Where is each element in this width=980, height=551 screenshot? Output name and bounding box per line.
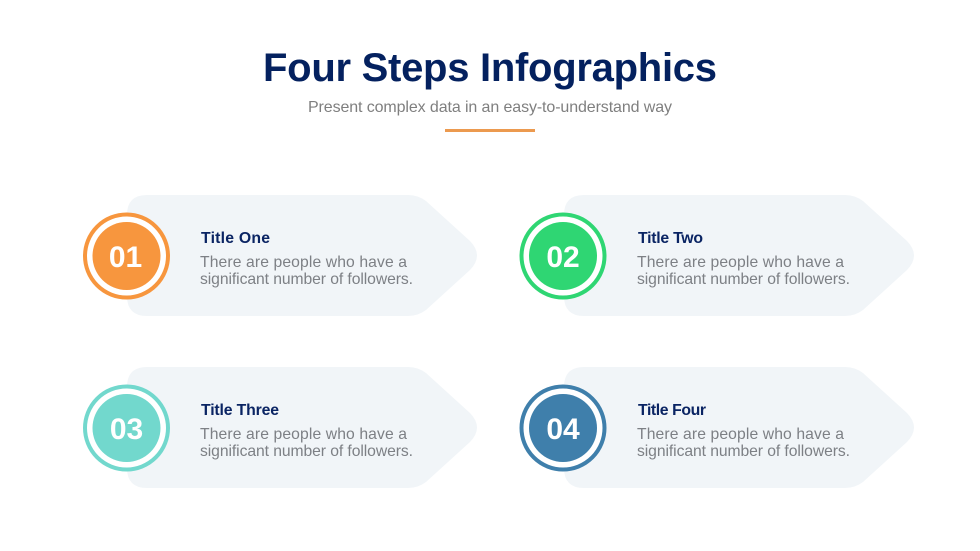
description: There are people who have a (200, 426, 407, 443)
description: significant number of followers. (200, 271, 413, 288)
description: There are people who have a (637, 254, 844, 271)
number badge 04 (522, 386, 604, 470)
number badge 04: 04 (546, 413, 580, 446)
number badge 02 (522, 214, 604, 298)
arrow card (127, 367, 477, 488)
number badge 02: 02 (546, 241, 580, 274)
description: significant number of followers. (200, 443, 413, 460)
step 1 panel (85, 195, 477, 316)
title: Four Steps Infographics (263, 46, 717, 90)
number badge 03 (85, 386, 168, 470)
number badge 01: 01 (109, 241, 142, 274)
arrow card (564, 367, 914, 488)
description: significant number of followers. (637, 271, 850, 288)
step 3 panel (85, 367, 477, 488)
number badge 01 (85, 214, 168, 298)
accent rule (445, 129, 535, 132)
description: significant number of followers. (637, 443, 850, 460)
number badge 03: 03 (110, 413, 143, 446)
subtitle: Present complex data in an easy-to-understand way (308, 99, 672, 116)
heading: Title Two: Title Two (638, 230, 703, 247)
heading: Title Three: Title Three (201, 402, 279, 419)
heading: Title One: Title One (201, 230, 270, 247)
description: There are people who have a (200, 254, 407, 271)
description: There are people who have a (637, 426, 844, 443)
arrow card (564, 195, 914, 316)
arrow card (127, 195, 477, 316)
heading: Title Four: Title Four (638, 402, 706, 419)
step 4 panel (522, 367, 914, 488)
step 2 panel (522, 195, 914, 316)
